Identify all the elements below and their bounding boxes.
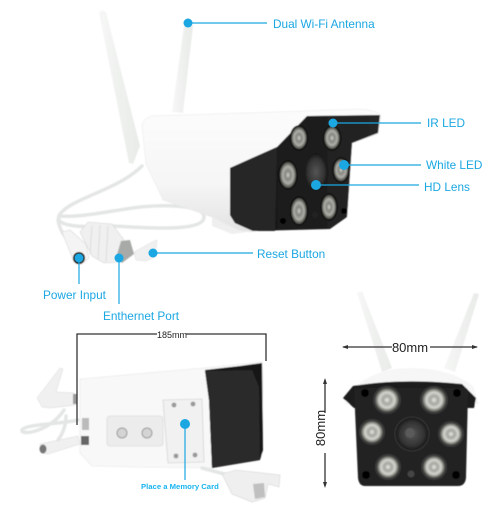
callout: Ethernet Port [103, 254, 180, 323]
callout: Reset Button [148, 247, 325, 261]
callout: White LED: White LED [426, 158, 482, 172]
screw holes [280, 208, 347, 224]
ethernet socket [116, 240, 134, 263]
callout: Power Input: Power Input [43, 288, 107, 302]
LEDs [279, 126, 349, 225]
front lens [395, 417, 429, 451]
callout: Ethernet Port: Enthernet Port [103, 309, 180, 323]
dimension: 80mm width: 80mm [392, 340, 428, 355]
memory card cover [163, 399, 204, 463]
right antenna [172, 23, 193, 113]
callout: Dual Wi-Fi Antenna: Dual Wi-Fi Antenna [273, 17, 375, 31]
callout: Power Input [43, 254, 107, 302]
side view body [80, 362, 263, 468]
HD lens [304, 153, 328, 191]
reset button stub [134, 240, 157, 261]
side plane of dark face [230, 147, 277, 231]
front LEDs [360, 387, 463, 479]
connector under body [202, 468, 280, 502]
dimension: 185mm [77, 330, 266, 425]
front antennas [357, 291, 392, 372]
callout: HD Lens [311, 180, 470, 194]
QR label [81, 418, 89, 445]
left antenna [99, 10, 140, 164]
callout: Reset Button: Reset Button [257, 247, 325, 261]
callout: Place a Memory Card [141, 419, 219, 491]
callout: White LED [339, 158, 482, 172]
cables [58, 166, 204, 244]
connector: power input [62, 230, 89, 264]
callout: Place a Memory Card: Place a Memory Card [141, 482, 219, 491]
front dome [345, 368, 479, 404]
connector: ethernet port [80, 222, 124, 263]
mount plate [107, 416, 163, 446]
dark front face [230, 115, 380, 231]
callout: IR LED: IR LED [427, 116, 465, 130]
callout: Dual Wi-Fi Antenna [184, 17, 375, 31]
callout: HD Lens: HD Lens [424, 180, 470, 194]
main camera photo [58, 10, 381, 264]
side view dark hood [205, 363, 263, 468]
dimension: 80mm height [313, 378, 328, 488]
camera body [142, 109, 381, 232]
hood sides [343, 381, 476, 408]
screw holes [361, 389, 461, 479]
dimension: 185mm: 185mm [157, 330, 187, 340]
lower lip [212, 217, 255, 234]
side view camera [22, 362, 280, 502]
dimension: 80mm width [342, 340, 478, 355]
dimension: 80mm height: 80mm [313, 410, 328, 446]
front view camera [343, 291, 479, 486]
front face [354, 388, 468, 486]
side view antennas and cables [22, 368, 80, 454]
callout: IR LED [328, 116, 465, 130]
